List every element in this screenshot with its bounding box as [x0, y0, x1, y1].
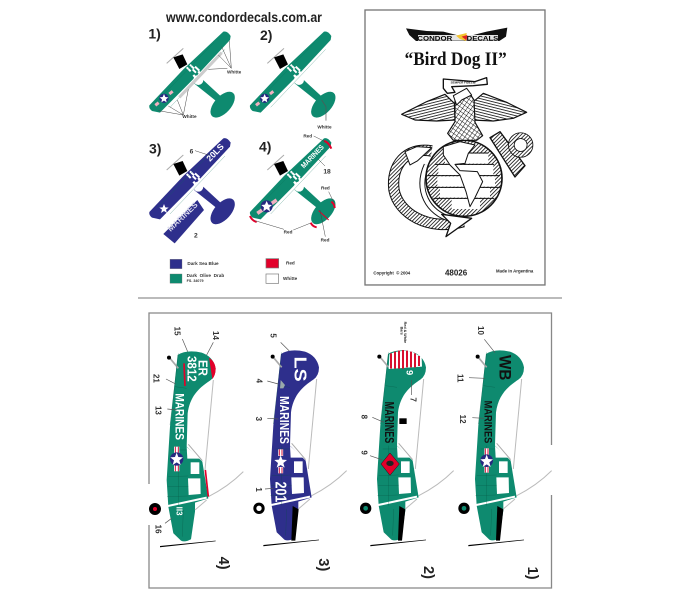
no 5: 5	[269, 333, 278, 338]
swatch white	[266, 274, 279, 283]
red diamond	[381, 453, 399, 475]
red bars	[175, 447, 178, 471]
roundel	[170, 452, 183, 466]
no 14: 14	[211, 331, 220, 340]
tail wheel	[167, 356, 171, 360]
plane 2 drawing	[250, 32, 340, 122]
red label top: Red	[303, 133, 312, 138]
swatch blue	[170, 259, 182, 269]
code WB: WB	[495, 355, 514, 380]
number 2: 2)	[260, 27, 272, 43]
plane 1 strut	[179, 53, 222, 97]
title: “Bird Dog II”	[405, 49, 507, 70]
globe	[426, 140, 502, 216]
wheel hub	[153, 507, 157, 511]
main wheel	[458, 503, 470, 514]
stripe note: Red & White	[403, 322, 407, 343]
fuselage 3	[263, 350, 347, 546]
number 3: 3)	[149, 140, 161, 156]
callouts	[265, 342, 289, 489]
ribbon	[443, 78, 487, 93]
striped rudder	[389, 351, 422, 369]
no 15: 15	[172, 327, 181, 336]
panel: top view plane 4	[250, 133, 340, 243]
fuselage 1	[468, 350, 552, 546]
code LS: LS	[290, 357, 310, 382]
panel: side view plane 2	[360, 322, 454, 579]
label white: Whitte	[317, 125, 332, 130]
callouts	[165, 339, 213, 523]
callout 2: 2	[194, 233, 198, 240]
legend red: Red	[286, 261, 295, 266]
website heading: www.condordecals.com.ar	[165, 10, 323, 25]
red rudder	[209, 358, 216, 379]
plane 1 roundel	[155, 91, 173, 105]
black cowling	[496, 506, 503, 541]
panel: side view plane 1	[455, 326, 552, 580]
plane number: 1)	[524, 567, 540, 580]
divider	[138, 298, 562, 299]
wing panel text: MARINES	[166, 200, 200, 233]
fuselage 2	[370, 350, 454, 546]
callout 18: 18	[323, 168, 331, 175]
plane 4 wing text: MARINES	[299, 143, 326, 170]
number 4: 4)	[259, 139, 271, 155]
black cowling	[291, 506, 299, 541]
black cowling	[398, 506, 405, 541]
no 13: 13	[154, 406, 163, 415]
product number: 48026	[445, 268, 468, 277]
diamond insignia	[386, 461, 394, 466]
main wheel	[360, 503, 371, 514]
plane 4 red tips	[250, 141, 335, 227]
roundel bars	[169, 447, 185, 471]
no 12: 12	[458, 415, 467, 424]
wheel hub	[256, 506, 262, 511]
code 113: II3	[175, 507, 184, 516]
panel: side view plane 3	[253, 333, 347, 571]
no 21: 21	[152, 374, 161, 383]
label white lower: Whitte	[182, 114, 197, 119]
legend dark sea blue: Dark Sea Blue	[187, 261, 219, 266]
anchor fluke band	[394, 150, 463, 224]
code 9: 9	[404, 370, 414, 375]
callout 6 line	[195, 151, 208, 155]
marines: MARINES	[482, 401, 494, 444]
plane number: 4)	[215, 557, 231, 570]
rudder stripes	[391, 350, 419, 369]
callout 6: 6	[190, 148, 194, 155]
main wheel	[253, 503, 265, 514]
plane 1 drawing	[149, 32, 239, 122]
motto: SEMPER FIDELIS	[451, 81, 476, 85]
plane 4 callouts	[255, 136, 334, 237]
made in: Made in Argentina	[496, 268, 534, 273]
code ER: ER	[195, 360, 209, 376]
callouts	[370, 380, 412, 460]
plane 3 separate wing panel	[163, 200, 204, 243]
panel: top view plane 1	[148, 25, 242, 122]
legend FS number: FS. 34079	[187, 279, 204, 283]
wings	[402, 94, 455, 121]
panel: side view plane 4	[149, 327, 243, 570]
legend	[170, 259, 298, 283]
main wheel	[149, 503, 161, 515]
plane 4 roundel	[257, 200, 277, 213]
roundel	[480, 454, 493, 467]
black mount	[399, 418, 407, 424]
no 4: 4	[255, 379, 264, 384]
swatch green	[170, 274, 182, 283]
red bars	[485, 448, 488, 473]
red stripes	[184, 363, 208, 497]
no 3: 3	[254, 417, 263, 422]
marines: MARINES	[382, 402, 396, 443]
tail wheel	[476, 355, 480, 359]
legend olive drab: Dark Olive Drab	[187, 273, 224, 278]
red label bottom: Red	[321, 238, 330, 243]
marines: MARINES	[277, 396, 291, 444]
swatch red	[266, 259, 279, 268]
no 10: 10	[476, 326, 485, 335]
plane 3 drawing	[149, 138, 239, 229]
no 16: 16	[154, 525, 163, 534]
bars	[273, 449, 288, 473]
plane number: 3)	[315, 558, 331, 571]
tail wheel	[377, 355, 381, 359]
plane 2 callout	[322, 100, 326, 121]
copyright: Copyright © 2004	[373, 270, 411, 275]
panel: top view plane 3	[149, 138, 239, 243]
no 11: 11	[455, 374, 464, 383]
code 201: 201	[272, 482, 289, 502]
no 1: 1	[254, 487, 263, 492]
card frame	[365, 10, 545, 285]
wheel hub	[363, 506, 368, 511]
body	[448, 89, 483, 140]
wheel hub	[462, 506, 466, 511]
anchor stock and ring	[490, 132, 525, 177]
condor logo	[406, 28, 507, 43]
marines: MARINES	[173, 393, 187, 440]
red label wing: Red	[284, 229, 293, 234]
red bars	[279, 449, 282, 473]
callouts	[469, 339, 495, 418]
plane 1 callouts	[158, 41, 231, 115]
no 8: 8	[360, 415, 369, 420]
lower frame	[149, 313, 552, 588]
panel: instruction card	[365, 10, 545, 285]
bars	[480, 448, 494, 473]
stripe note 2: Bars	[400, 327, 404, 335]
emblem	[394, 78, 530, 237]
star	[170, 453, 183, 465]
panel: top view plane 2	[250, 27, 340, 130]
star band	[275, 456, 287, 467]
condor logo: DECALS	[467, 36, 498, 43]
plane 4 drawing	[250, 138, 340, 229]
plane 3 star	[159, 204, 169, 213]
number 1: 1)	[148, 25, 161, 41]
star	[480, 455, 493, 467]
plane 2 roundel	[256, 91, 273, 105]
code 3812: 3812	[184, 356, 199, 382]
red label tail: Red	[321, 185, 330, 190]
plane 3 wing marking: 20LS	[204, 141, 226, 163]
no 7: 7	[409, 397, 418, 402]
insignia	[280, 380, 285, 388]
legend white: Whitte	[283, 276, 298, 281]
label white: Whitte	[227, 69, 242, 74]
condor logo: CONDOR	[417, 36, 453, 43]
tail wheel	[271, 355, 275, 359]
plane number: 2)	[420, 566, 436, 579]
no 9: 9	[360, 450, 369, 455]
fuselage 4	[160, 351, 243, 547]
star	[274, 455, 287, 468]
